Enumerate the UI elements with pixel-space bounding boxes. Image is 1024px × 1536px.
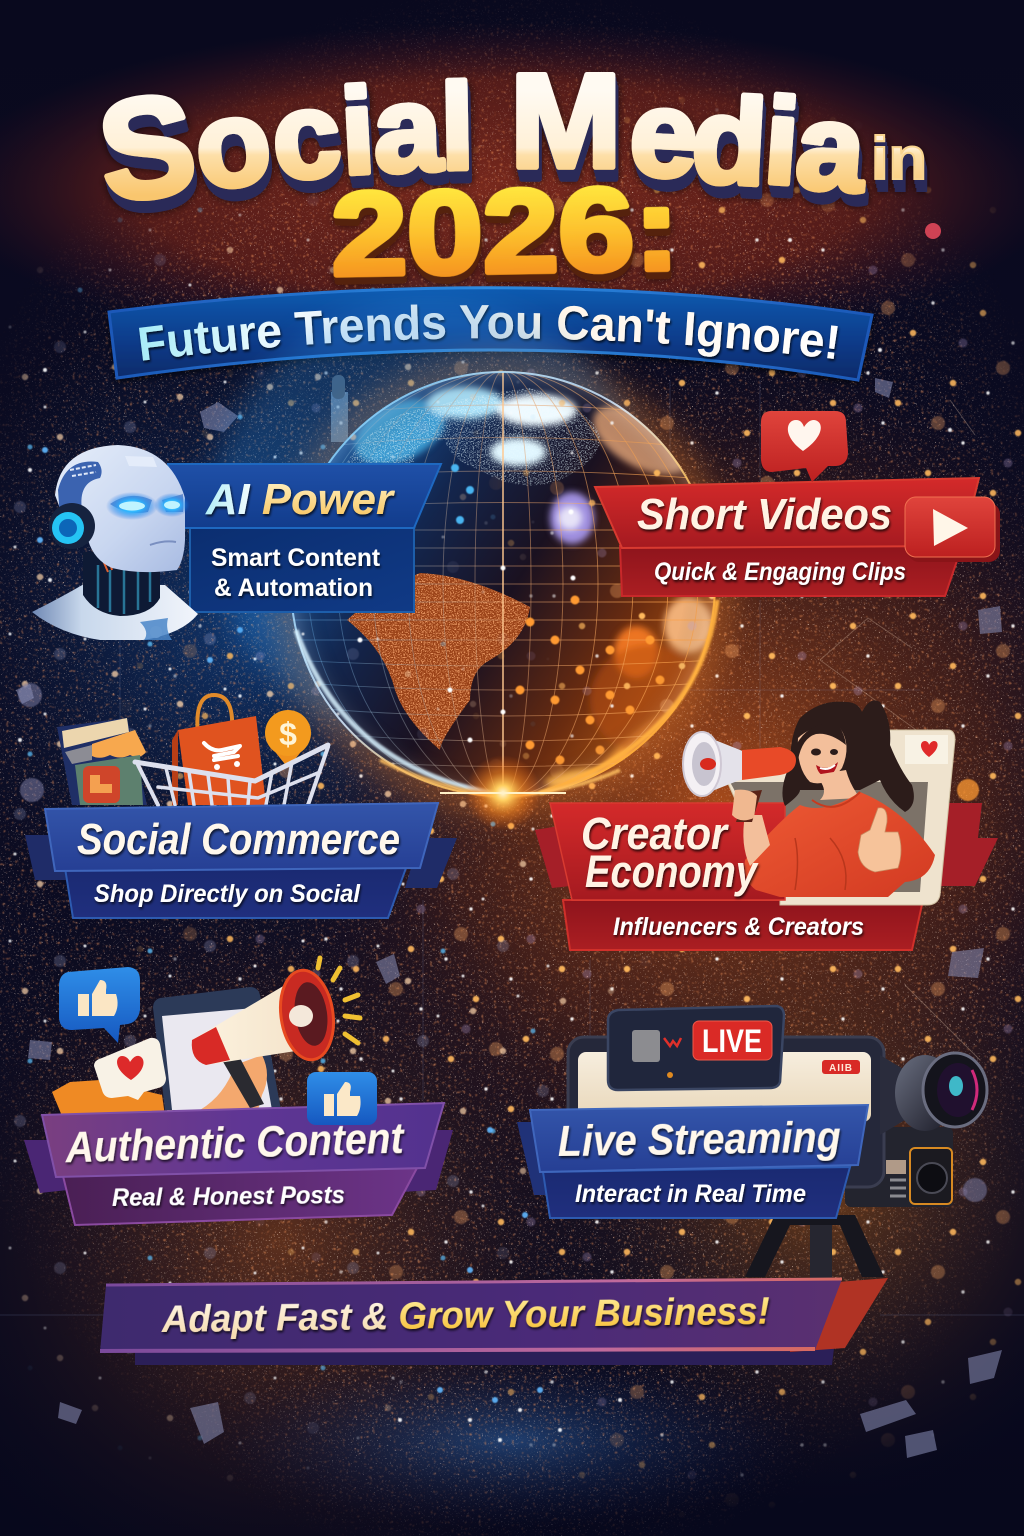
subtitle banner [106,286,875,386]
icon: hand [200,1055,267,1110]
footer text: Adapt Fast & Grow Your Business! [161,1291,770,1341]
Social Commerce ribbon tails [25,835,457,888]
globe land [345,386,712,793]
title line: Social Media: edia [627,64,871,218]
text: Smart Content & Automation: & Automation [214,574,373,602]
panel: Live Streaming [517,1006,987,1278]
floating shards [16,223,1002,1458]
icon: creator card [722,730,955,905]
LIVE badge: LIVE [702,1023,762,1059]
Authentic Content top band [42,1103,444,1177]
icon: phone [153,987,281,1110]
heading: Creator Economy: Creator [581,808,729,859]
panel: Creator Economy [535,700,998,950]
panel: Social Commerce [25,695,457,918]
text: Quick & Engaging Clips: Quick & Engaging Clips [654,558,906,586]
antenna [331,375,348,442]
text: Interact in Real Time: Interact in Real Time [575,1180,806,1208]
icon: shopping bag [172,695,266,805]
heading: Short Videos: Short Videos [637,490,892,539]
Live Streaming top band [530,1105,868,1172]
Live Streaming ribbon tails [517,1122,548,1195]
icon: like tile [307,1072,377,1125]
Authentic Content sub band [63,1168,417,1225]
icon: blue like bubble [59,967,140,1043]
AI Power sub band [190,528,414,612]
heading: Authentic Content: Authentic Content [64,1114,406,1172]
icon: creator megaphone [683,732,796,822]
title line: Social Media: S [90,63,204,233]
icon: orange folder [52,1080,165,1116]
globe lights [300,373,714,777]
title [90,47,927,301]
title year: 2026: 2026: [330,163,680,301]
panel: AI Power [32,445,441,640]
icon: live panel [608,1006,784,1090]
icon: video camera [568,1037,987,1207]
icon: storefront [57,718,147,805]
icon: play button [905,497,1000,562]
text: Shop Directly on Social: Shop Directly on Social [94,880,361,908]
icon: big megaphone [192,967,339,1108]
icon: woman creator [743,700,935,897]
icon: yellow rays [318,958,360,1043]
icon: robot head [32,445,198,640]
panel: Authentic Content [24,958,453,1225]
heading: Live Streaming: Live Streaming [557,1113,841,1166]
icon: dollar badge: $ [279,716,297,752]
subtitle text: Future Trends You Can't Ignore! [138,304,840,364]
text: Real & Honest Posts: Real & Honest Posts [112,1181,345,1212]
icon: video camera: AIIB [829,1063,853,1074]
Social Commerce sub band [65,868,406,918]
footer banner [100,1278,888,1365]
heading: Creator Economy: Economy [585,846,759,897]
icon: tripod [745,1215,884,1278]
heading: AI Power: AI Power [205,475,396,524]
Short Videos top band [595,478,979,548]
title line: Social Media: M [510,47,622,196]
Authentic Content ribbon tails [24,1130,453,1193]
icon: shopping cart [135,745,328,805]
Live Streaming sub band [543,1167,850,1218]
heading: Social Commerce: Social Commerce [77,815,400,864]
Creator Economy top band [550,803,785,900]
icon: dollar badge [265,710,311,768]
globe [208,298,735,831]
Creator Economy sub band [563,900,923,950]
icon: heart bubble [761,411,848,482]
AI Power top band [168,464,441,528]
text: Influencers & Creators: Influencers & Creators [613,913,864,941]
globe grid [290,371,716,797]
Social Commerce top band [45,803,438,871]
icon: heart bubble [94,1038,166,1100]
text: Smart Content & Automation: Smart Content [211,544,381,572]
title line: Social Media: ocial [189,57,539,215]
title word: in: in [871,125,927,192]
Short Videos sub band [620,546,962,596]
Creator Economy ribbon tails [535,803,998,888]
panel: Short Videos [595,411,1000,596]
